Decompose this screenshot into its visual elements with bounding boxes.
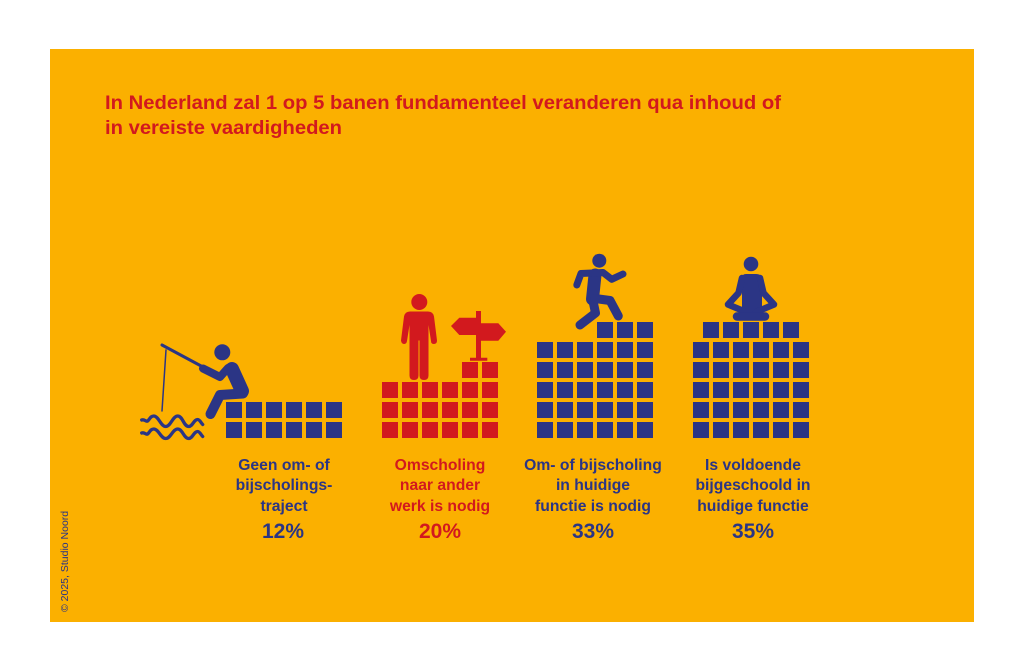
label 12%: bijscholings- [236, 477, 332, 494]
icon: standing person [401, 294, 437, 380]
title: In Nederland zal 1 op 5 banen fundamenteel veranderen qua inhoud of [105, 92, 781, 114]
label 20%: Omscholing [395, 457, 485, 474]
label 12%: traject [260, 498, 308, 515]
title: in vereiste vaardigheden [105, 117, 342, 139]
value 35%: 35% [732, 520, 774, 543]
icon: person fishing [142, 344, 243, 438]
label 35%: Is voldoende [705, 457, 801, 474]
label 20%: naar ander [400, 477, 480, 494]
block stack 33% [537, 322, 653, 438]
value 20%: 20% [419, 520, 461, 543]
column: voldoende 35% [693, 257, 811, 543]
value 12%: 12% [262, 520, 304, 543]
label 12%: Geen om- of [238, 457, 331, 474]
label 20%: werk is nodig [389, 498, 490, 515]
background panel [50, 49, 974, 622]
block stack 12% [226, 402, 342, 438]
label 33%: functie is nodig [535, 498, 651, 515]
label 33%: in huidige [556, 477, 630, 494]
label 33%: Om- of bijscholing [524, 457, 662, 474]
column: bijscholing 33% [524, 254, 662, 543]
block stack 35% [693, 322, 809, 438]
block stack 20% [382, 362, 498, 438]
column: omscholing 20% [382, 294, 506, 543]
value 33%: 33% [572, 520, 614, 543]
icon: signpost [451, 311, 506, 361]
label 35%: bijgeschoold in [695, 477, 811, 494]
icon: meditating person [728, 257, 774, 316]
label 35%: huidige functie [697, 498, 809, 515]
copyright credit: © 2025, Studio Noord [59, 511, 71, 612]
column: geen traject 12% [142, 344, 342, 543]
icon: running person [577, 254, 623, 325]
